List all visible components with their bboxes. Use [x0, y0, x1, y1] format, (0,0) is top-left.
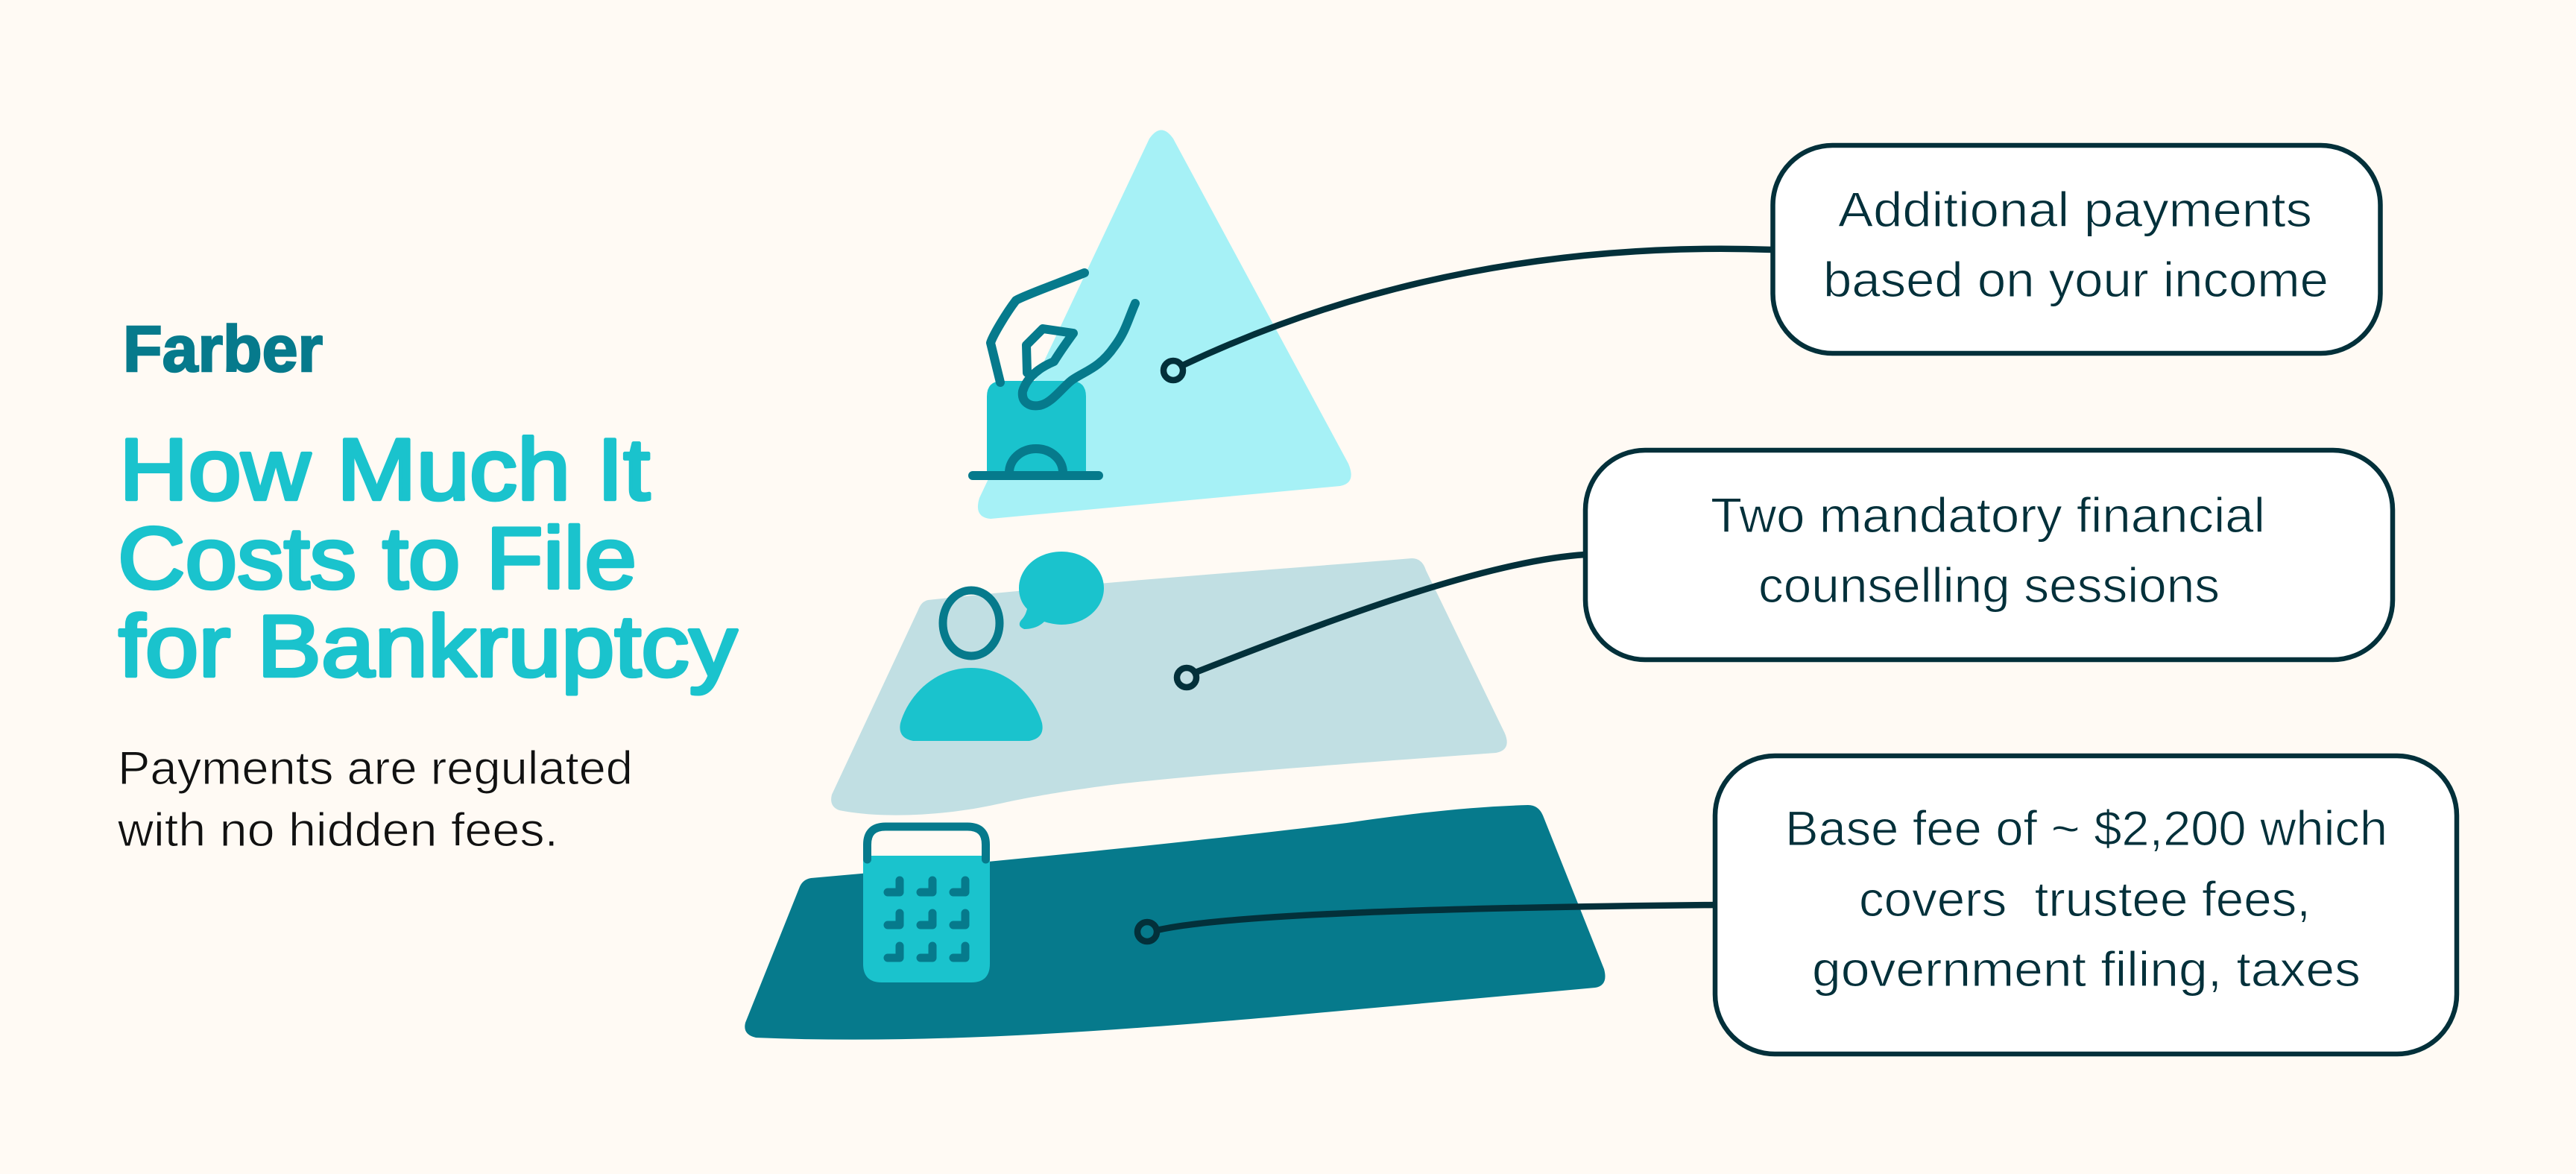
icon: hand dropping ballot into box — [973, 273, 1135, 477]
subtitle: with no hidden fees. — [117, 804, 558, 856]
title: for Bankruptcy — [119, 597, 738, 695]
callout: additional payments: based on your income — [1823, 252, 2329, 307]
subtitle — [117, 742, 633, 856]
person body — [900, 668, 1043, 741]
callout: base fee: covers trustee fees, — [1859, 871, 2311, 927]
speech bubble — [1019, 552, 1104, 629]
callout: counselling sessions — [1585, 450, 2393, 660]
subtitle: Payments are regulated — [118, 742, 633, 795]
connector: top tier to first callout — [1164, 249, 1772, 380]
connector: bottom tier to third callout — [1137, 905, 1714, 941]
icon: person with speech bubble — [900, 552, 1104, 741]
calculator keys — [888, 880, 965, 958]
ballot box body — [987, 381, 1086, 477]
ballot box base and slot arc — [973, 449, 1099, 476]
pyramid bottom tier — [745, 805, 1606, 1040]
hand outline — [991, 273, 1135, 405]
icon: calculator — [863, 827, 990, 982]
calculator handle — [868, 827, 985, 859]
title — [118, 420, 738, 695]
callout: counselling sessions: counselling sessions — [1758, 558, 2220, 613]
pyramid top tier — [978, 130, 1351, 519]
connector: middle tier to second callout — [1177, 555, 1585, 687]
pyramid middle tier — [831, 558, 1507, 815]
title: How Much It — [119, 420, 650, 518]
callout: additional payments — [1772, 145, 2381, 353]
title: Costs to File — [118, 509, 637, 607]
callout: base fee: Base fee of ~ $2,200 which — [1785, 801, 2387, 856]
callout: base fee: government filing, taxes — [1812, 941, 2361, 997]
callout: additional payments: Additional payments — [1838, 182, 2312, 237]
callout: base fee — [1715, 756, 2457, 1054]
logo: Farber: Farber — [123, 313, 323, 385]
calculator body — [863, 856, 990, 982]
person head — [943, 590, 1000, 656]
callout: counselling sessions: Two mandatory financial — [1711, 487, 2265, 543]
